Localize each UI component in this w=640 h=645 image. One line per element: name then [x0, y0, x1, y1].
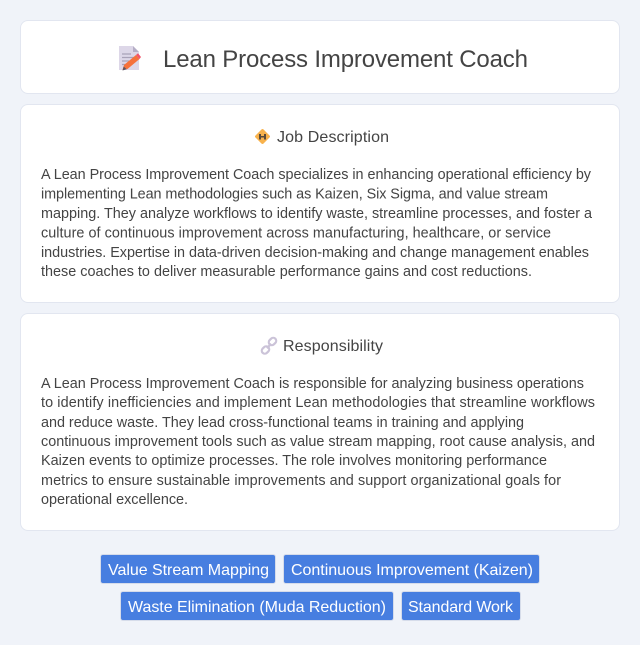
text block: job description: culture of continuous improvement across manufacturing, healthcare, or service	[41, 226, 551, 242]
text block: job description: these coaches to deliver measurable performance gains and cost reductions.	[41, 264, 532, 280]
text block: responsibility: operational excellence.	[41, 492, 188, 508]
text block: job description: industries. Expertise in data-driven decision-making and change management enables	[41, 245, 589, 261]
text block: responsibility: continuous improvement tools such as value stream mapping, root cause analysis, and	[41, 434, 595, 450]
tag labels: Waste Elimination (Muda Reduction)	[128, 599, 386, 616]
tag labels: Value Stream Mapping	[108, 562, 269, 579]
text block: responsibility: A Lean Process Improvement Coach is responsible for analyzing business operations	[41, 376, 584, 392]
title text: Lean Process Improvement Coach	[163, 46, 528, 73]
icon: memo with pencil	[119, 46, 141, 70]
tag: value stream mapping	[100, 554, 276, 584]
text block: responsibility: metrics to ensure sustainable improvements and support organizational goals for	[41, 473, 561, 489]
tag: continuous improvement	[283, 554, 540, 584]
text block: job description	[41, 167, 592, 280]
heading: job description: Job Description	[277, 129, 389, 146]
panel: title	[20, 20, 620, 94]
tag: waste elimination	[120, 591, 394, 621]
text block: job description: implementing Lean methodologies such as Kaizen, Six Sigma, and value stream	[41, 186, 548, 202]
tag labels: Standard Work	[408, 599, 514, 616]
icon: diamond sign	[255, 129, 270, 144]
panel: job description	[20, 104, 620, 303]
text block: job description: A Lean Process Improvement Coach specializes in enhancing operational efficiency by	[41, 167, 592, 183]
text block: responsibility: to identify inefficiencies and implement Lean methodologies that streamline workflows	[41, 395, 595, 411]
tag labels: Continuous Improvement (Kaizen)	[291, 562, 533, 579]
heading: responsibility: Responsibility	[283, 338, 383, 355]
text block: job description: mapping. They analyze workflows to identify waste, streamline processes, and foster a	[41, 206, 592, 222]
text block: responsibility: and reduce waste. They lead cross-functional teams in training and applying	[41, 415, 524, 431]
panel: responsibility	[20, 313, 620, 531]
text block: responsibility: Kaizen events to optimize processes. The role involves monitoring performance	[41, 453, 547, 469]
icon: chain link	[260, 336, 278, 355]
tag: standard work	[401, 591, 521, 621]
